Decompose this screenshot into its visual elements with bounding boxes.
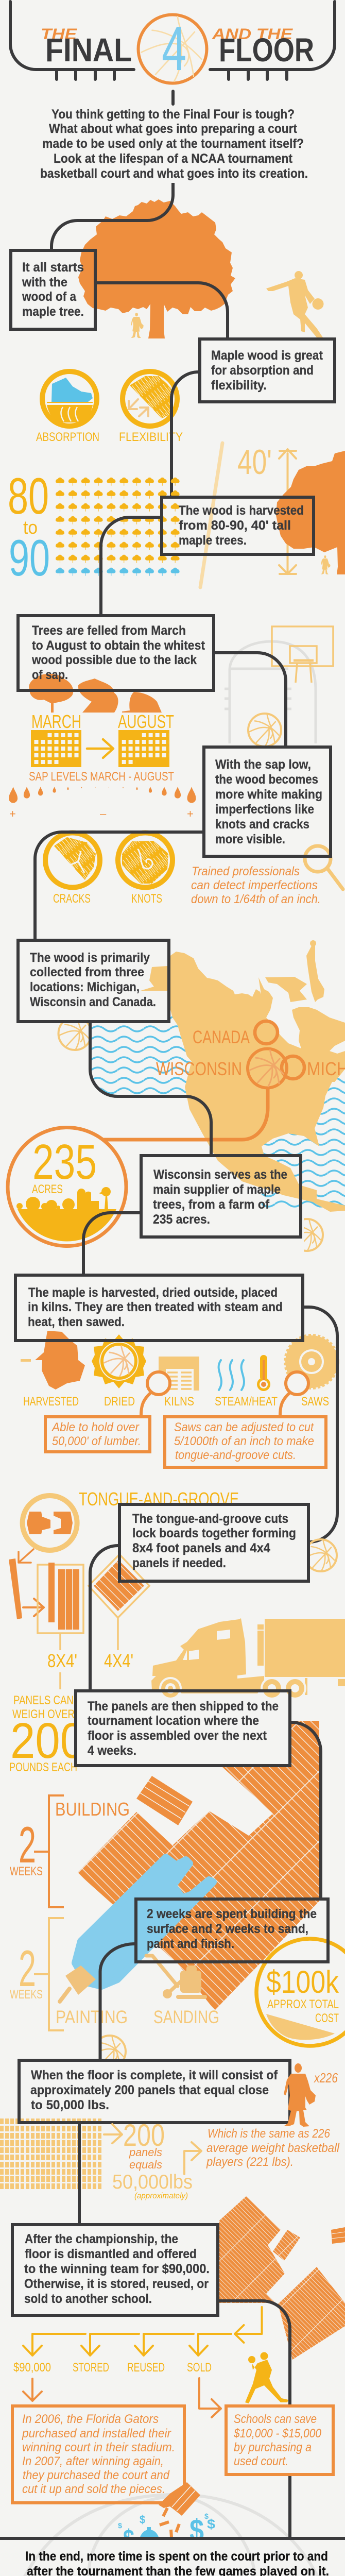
icon: backboard	[272, 626, 333, 683]
basketball emblem	[138, 13, 207, 83]
8x4 panel diagram	[9, 1558, 83, 1689]
text box: after the championship: Otherwise, it is stored, reused, or	[24, 2277, 209, 2291]
callout box: schools save: $10,000 - $15,000	[233, 2427, 322, 2441]
callout box: saw precision	[165, 1417, 326, 1467]
text box: Wisconsin supplier: trees, from a farm of	[153, 1197, 270, 1212]
intro text: made to be used only at the tournament itself?	[42, 137, 304, 151]
intro text: You think getting to the Final Four is tough?	[51, 107, 295, 122]
icon: yellow player	[245, 2352, 288, 2403]
step labels: HARVESTED	[23, 1395, 79, 1409]
text box: assembly timeline: paint and finish.	[147, 1937, 234, 1951]
month labels: MARCH	[31, 711, 81, 732]
text box: three locations: The wood is primarily	[30, 951, 150, 965]
connector: to divider	[288, 2476, 291, 2538]
callout box: Florida Gators	[12, 2406, 184, 2503]
connector: box 4 to box 5	[215, 653, 286, 747]
text box: floor complete: When the floor is complete, it will consist of	[31, 2068, 278, 2082]
callout box: Florida Gators: In 2007, after winning again,	[22, 2454, 164, 2468]
weight statistic: WEIGH OVER	[12, 1707, 75, 1721]
title: AND THE	[212, 26, 293, 43]
weight statistic	[9, 1693, 85, 1774]
statistic: 200 panels equals 50,000 lbs: (approximately)	[134, 2192, 188, 2200]
height measure: 40 feet: 40'	[237, 443, 272, 482]
icon: basketball right of box 9	[305, 1539, 337, 1571]
text box: harvest	[162, 497, 314, 554]
text box: felling season: of sap.	[32, 668, 68, 682]
callout box: schools save: Schools can save	[234, 2412, 317, 2426]
text box: tongue-and-groove: The tongue-and-groove cuts	[132, 1512, 288, 1526]
text box: after the championship: floor is dismantled and offered	[25, 2247, 197, 2261]
icon: sander	[146, 1956, 207, 1999]
text box: harvest steps: heat, then sawed.	[28, 1315, 125, 1329]
text box: shipping: 4 weeks.	[88, 1743, 136, 1758]
month labels	[31, 711, 174, 732]
callout box: schools save: by purchasing a	[234, 2441, 312, 2454]
text box: absorption and flexibility: flexibility.	[211, 378, 267, 393]
icon: saw blade	[285, 1335, 338, 1388]
4x4 panel diagram: 4X4'	[104, 1650, 133, 1671]
ocean waves	[91, 1002, 345, 1208]
sap drops scale: +	[9, 807, 16, 820]
box 10 background	[74, 1689, 291, 1767]
callout box: kilns capacity: 50,000' of lumber.	[52, 1434, 141, 1448]
text box: three locations: Wisconsin and Canada.	[30, 995, 156, 1009]
bracket: building two weeks: WEEKS	[10, 1865, 43, 1878]
icon: small player beside tree	[131, 313, 144, 338]
connector: box 9 to box 10	[90, 1546, 118, 1691]
text box: harvest steps	[15, 1275, 303, 1341]
text box: Wisconsin supplier	[141, 1156, 301, 1237]
connector: intro to first box	[51, 183, 173, 250]
money icons: $	[123, 2524, 134, 2553]
bracket: building two weeks: BUILDING	[55, 1799, 130, 1820]
label: cracks: CRACKS	[53, 892, 91, 906]
callout box: kilns capacity	[45, 1417, 150, 1452]
month labels: AUGUST	[118, 711, 174, 732]
callout box: Florida Gators: purchased and installed their	[22, 2427, 171, 2441]
icon: truck	[151, 1618, 345, 1700]
callout: same as 226 players: players (221 lbs).	[206, 2155, 294, 2169]
icon: cracks	[45, 833, 100, 887]
text box: harvest: maple trees.	[179, 533, 247, 548]
callout box: schools save	[226, 2406, 333, 2475]
cost circle	[256, 1939, 345, 2046]
map location labels	[156, 1027, 345, 1079]
outcome arrows	[23, 2307, 262, 2355]
map location rings	[103, 1021, 304, 1140]
icon: basketball behind box 5	[248, 714, 281, 747]
text box: maple tree: wood of a	[22, 290, 77, 304]
callout box: saw precision: tongue-and-groove cuts.	[175, 1448, 296, 1462]
connector: box 11 to box 12	[100, 1944, 134, 2060]
title: THE	[41, 26, 77, 43]
icon: kilns	[159, 1357, 199, 1391]
text box: sap low: imperfections like	[215, 802, 314, 817]
statistic: 200 panels equals 50,000 lbs: 50,000lbs	[112, 2171, 193, 2193]
connector: box 2 to box 3	[171, 372, 198, 497]
bracket: finishing two weeks: 2	[19, 1940, 36, 1997]
icon: three trees being felled	[29, 674, 162, 713]
text box: sap low: more visible.	[215, 832, 285, 846]
floor panels graphic	[77, 1721, 319, 2010]
sap drops scale: –	[100, 807, 107, 820]
intro text	[40, 107, 308, 181]
calendar: March	[31, 730, 81, 767]
statistic: 80 to 90: 80	[8, 467, 49, 524]
panel: 235 acres circle	[8, 1127, 126, 1246]
callout box: Florida Gators: cut it up and sold the pieces.	[22, 2482, 165, 2496]
step labels: SAWS	[301, 1395, 329, 1409]
sap drops scale	[9, 787, 196, 820]
heading: tongue-and-groove: TONGUE-AND-GROOVE	[79, 1488, 239, 1510]
text box: sap low: knots and cracks	[215, 817, 309, 832]
icon: basketball right	[304, 1218, 324, 1252]
arrow: joint to panel	[19, 1549, 33, 1563]
callout: trained professionals: down to 1/64th of an inch.	[191, 892, 321, 906]
intro text: basketball court and what goes into its creation.	[40, 166, 308, 181]
bracket: building two weeks	[10, 1795, 130, 1907]
outcome labels: SOLD	[187, 2361, 212, 2375]
callout: same as 226 players	[206, 2127, 340, 2169]
text box: maple tree: It all starts	[22, 260, 84, 275]
text box: assembly timeline: 2 weeks are spent building the	[147, 1907, 317, 1921]
text box: tongue-and-groove: panels if needed.	[132, 1556, 226, 1570]
text box: maple tree: maple tree.	[22, 304, 84, 319]
connector: box 3 to box 4	[101, 517, 160, 616]
icon: magnifier	[305, 846, 343, 889]
statistic: 80 to 90: to	[23, 517, 38, 538]
text box: harvest: The wood is harvested	[179, 503, 304, 518]
4x4 panel diagram	[89, 1554, 149, 1671]
text box: sap low	[204, 747, 331, 856]
paint stroke	[75, 1857, 213, 1986]
title	[41, 26, 314, 69]
text box: shipping: The panels are then shipped to the	[88, 1699, 279, 1714]
text box: floor complete: approximately 200 panels that equal close	[30, 2083, 269, 2097]
court lines: bottom	[1, 2495, 341, 2576]
height measure: 40 feet	[237, 443, 296, 574]
text box: tongue-and-groove: lock boards together forming	[132, 1526, 296, 1540]
callout box: Florida Gators: they purchased the court and	[23, 2468, 170, 2482]
text box: after the championship	[12, 2225, 218, 2315]
sap drops scale: +	[187, 807, 194, 820]
outcome labels: STORED	[73, 2361, 109, 2375]
text box: three locations: collected from three	[30, 965, 144, 979]
text box: felling season: Trees are felled from March	[32, 623, 186, 638]
arrow: grid to 200	[104, 2124, 122, 2143]
statistic: 200 panels equals 50,000 lbs: equals	[129, 2158, 162, 2171]
money icons: $	[140, 2513, 145, 2526]
map: North America	[141, 940, 345, 1212]
divider	[0, 2537, 345, 2540]
arrow: 90,000 to Gators	[23, 2379, 42, 2401]
title: FINAL	[45, 31, 132, 69]
money icons	[118, 2513, 215, 2537]
text box: sap low: With the sap low,	[215, 757, 311, 772]
bracket: finishing two weeks: WEEKS	[10, 1988, 43, 2002]
text box: tongue-and-groove: 8x4 foot panels and 4x4	[132, 1541, 270, 1555]
text box: after the championship: After the championship, the	[25, 2232, 178, 2246]
icon: harvested tree	[21, 1331, 85, 1389]
icon: basketball near box 12	[102, 2035, 127, 2059]
magnifier callout: saws	[280, 1372, 308, 1415]
label: absorption: ABSORPTION	[36, 430, 99, 444]
step labels: KILNS	[164, 1395, 194, 1409]
icon: flexibility	[123, 371, 177, 426]
icon: basketball clipped left	[58, 1023, 89, 1051]
callout box: saw precision: 5/1000th of an inch to make	[174, 1434, 314, 1448]
icon: tongue and groove joint	[23, 1496, 77, 1550]
statistic: 200 panels equals 50,000 lbs: panels	[129, 2146, 162, 2159]
tree grid pictogram	[56, 478, 183, 577]
text box: felling season: wood possible due to the lack	[31, 653, 197, 667]
map location labels: CANADA	[193, 1027, 250, 1047]
outcome labels	[13, 2361, 212, 2375]
statistic: 200 panels equals 50,000 lbs	[112, 2118, 193, 2200]
outcome labels: REUSED	[127, 2361, 165, 2375]
panel: 235 acres circle: 235	[32, 1134, 97, 1190]
icon: thermometer	[257, 1355, 270, 1391]
text box: three locations	[18, 940, 169, 1022]
text box: felling season	[18, 616, 214, 690]
icon: floor bundle with falling pieces	[159, 2482, 200, 2537]
text box: Wisconsin supplier: main supplier of maple	[153, 1182, 281, 1197]
text box: felling season: to August to obtain the whitest	[32, 638, 205, 653]
text box: floor complete	[19, 2060, 290, 2123]
label: flexibility: FLEXIBILITY	[119, 430, 183, 444]
panel: 235 acres circle: ACRES	[32, 1182, 63, 1196]
connector: box 13 to bottom	[219, 2301, 290, 2406]
connector: box 10 to box 11	[291, 1722, 321, 1899]
text box: assembly timeline	[136, 1899, 328, 1962]
conclusion text	[25, 2549, 329, 2576]
text box: absorption and flexibility: Maple wood is great	[211, 348, 323, 363]
icon: dried sun	[92, 1334, 146, 1388]
box 9 background	[118, 1503, 310, 1583]
weight statistic: POUNDS EACH	[9, 1760, 77, 1774]
text box: harvest: from 80-90, 40' tall	[179, 518, 291, 533]
icon: large maple tree	[78, 199, 235, 338]
callout box: Florida Gators: In 2006, the Florida Gators	[22, 2412, 159, 2426]
connector tick	[171, 91, 175, 104]
connector: box 6 to box 7	[90, 1023, 211, 1156]
icon: right tree	[276, 451, 345, 574]
text box: absorption and flexibility: for absorption and	[211, 363, 314, 378]
money icons: $	[118, 2521, 122, 2530]
statistic: 80 to 90	[8, 467, 50, 586]
text box: sap low: more white making	[215, 787, 322, 802]
text box: harvest steps: in kilns. They are then treated with steam and	[28, 1300, 283, 1314]
text box: sap low: the wood becomes	[215, 772, 318, 787]
callout: same as 226 players: Which is the same as 226	[208, 2127, 331, 2141]
arrow: sold to savings	[199, 2378, 221, 2417]
icon: absorption	[42, 371, 97, 426]
text box: Wisconsin supplier: 235 acres.	[153, 1212, 210, 1227]
money icons: $	[204, 2512, 209, 2521]
arrow: to player comparison	[184, 2142, 201, 2174]
text box: assembly timeline: surface and 2 weeks to sand,	[147, 1922, 308, 1936]
label: knots: KNOTS	[131, 892, 162, 906]
header hoop frame	[10, 2, 335, 79]
text box: absorption and flexibility	[200, 339, 335, 402]
text box: tongue-and-groove	[119, 1504, 308, 1581]
labels: painting and sanding	[56, 2007, 219, 2027]
calendar: August	[118, 730, 169, 767]
basketball emblem: 4	[162, 13, 186, 83]
step labels	[23, 1395, 329, 1409]
magnifier callout: kilns	[141, 1372, 170, 1415]
step labels: STEAM/HEAT	[215, 1395, 278, 1409]
text box: after the championship: to the winning team for $90,000.	[24, 2262, 210, 2276]
connector: box 8 to box 9	[304, 1307, 337, 1542]
weight statistic: 200	[10, 1713, 85, 1769]
panel count grid	[0, 2119, 102, 2191]
connector: box 7 to box 8	[83, 1213, 140, 1275]
8x4 panel diagram: 8X4'	[47, 1650, 77, 1671]
court lines: upper	[225, 641, 316, 743]
callout: trained professionals: can detect imperfections	[191, 878, 318, 892]
dismantled floor panels	[219, 2196, 345, 2360]
text box: after the championship: sold to another school.	[24, 2292, 152, 2306]
label: sap levels: SAP LEVELS MARCH - AUGUST	[29, 770, 174, 784]
labels: painting and sanding: SANDING	[153, 2007, 219, 2027]
icon: orange player x226	[284, 2063, 316, 2127]
bracket: building two weeks: 2	[19, 1816, 36, 1873]
text box: shipping: tournament location where the	[88, 1714, 259, 1728]
icon: paintbrush	[60, 1965, 96, 2002]
intro text: Look at the lifespan of a NCAA tournament	[54, 151, 293, 166]
connector: box 12 to box 13	[78, 2124, 81, 2225]
text box: maple tree	[11, 250, 95, 329]
pole line	[200, 443, 222, 587]
map location labels: WISCONSIN	[156, 1058, 242, 1079]
connector: box 5 to box 6	[35, 832, 202, 940]
intro text: What about what goes into preparing a court	[49, 122, 298, 136]
callout box: schools save: used court.	[234, 2454, 288, 2468]
labels: painting and sanding: PAINTING	[56, 2007, 128, 2027]
icon: small player for scale	[321, 555, 331, 574]
weight statistic: PANELS CAN	[13, 1693, 74, 1707]
step labels: DRIED	[104, 1395, 135, 1409]
text box: floor complete: to 50,000 lbs.	[31, 2098, 109, 2112]
callout box: Florida Gators: winning court in their stadium.	[22, 2441, 175, 2454]
icon: dribbling player	[266, 271, 323, 337]
connector: box 1 to box 2	[97, 283, 228, 339]
text box: maple tree: with the	[22, 275, 67, 290]
text box: harvest steps: The maple is harvested, dried outside, placed	[28, 1285, 278, 1300]
text box: shipping: floor is assembled over the next	[88, 1728, 267, 1743]
money icons: $	[207, 2516, 216, 2532]
statistic: 200 panels equals 50,000 lbs: 200	[123, 2118, 165, 2153]
callout: trained professionals: Trained professionals	[192, 865, 300, 878]
label: x226: x226	[313, 2070, 338, 2086]
arrow: March to August	[87, 739, 113, 758]
icon: knots	[118, 833, 173, 887]
title: FLOOR	[219, 31, 314, 69]
bracket: finishing two weeks	[10, 1918, 64, 2030]
text box: three locations: locations: Michigan,	[30, 980, 140, 994]
text box: shipping	[76, 1691, 290, 1766]
icon: steam	[219, 1360, 244, 1390]
outcome labels: $90,000	[13, 2361, 51, 2375]
callout: trained professionals	[191, 865, 321, 906]
money icons: $	[189, 2513, 204, 2548]
text box: Wisconsin supplier: Wisconsin serves as the	[153, 1167, 287, 1182]
callout box: kilns capacity: Able to hold over	[51, 1420, 140, 1434]
callout box: saw precision: Saws can be adjusted to cut	[174, 1420, 314, 1434]
statistic: 80 to 90: 90	[9, 529, 50, 586]
